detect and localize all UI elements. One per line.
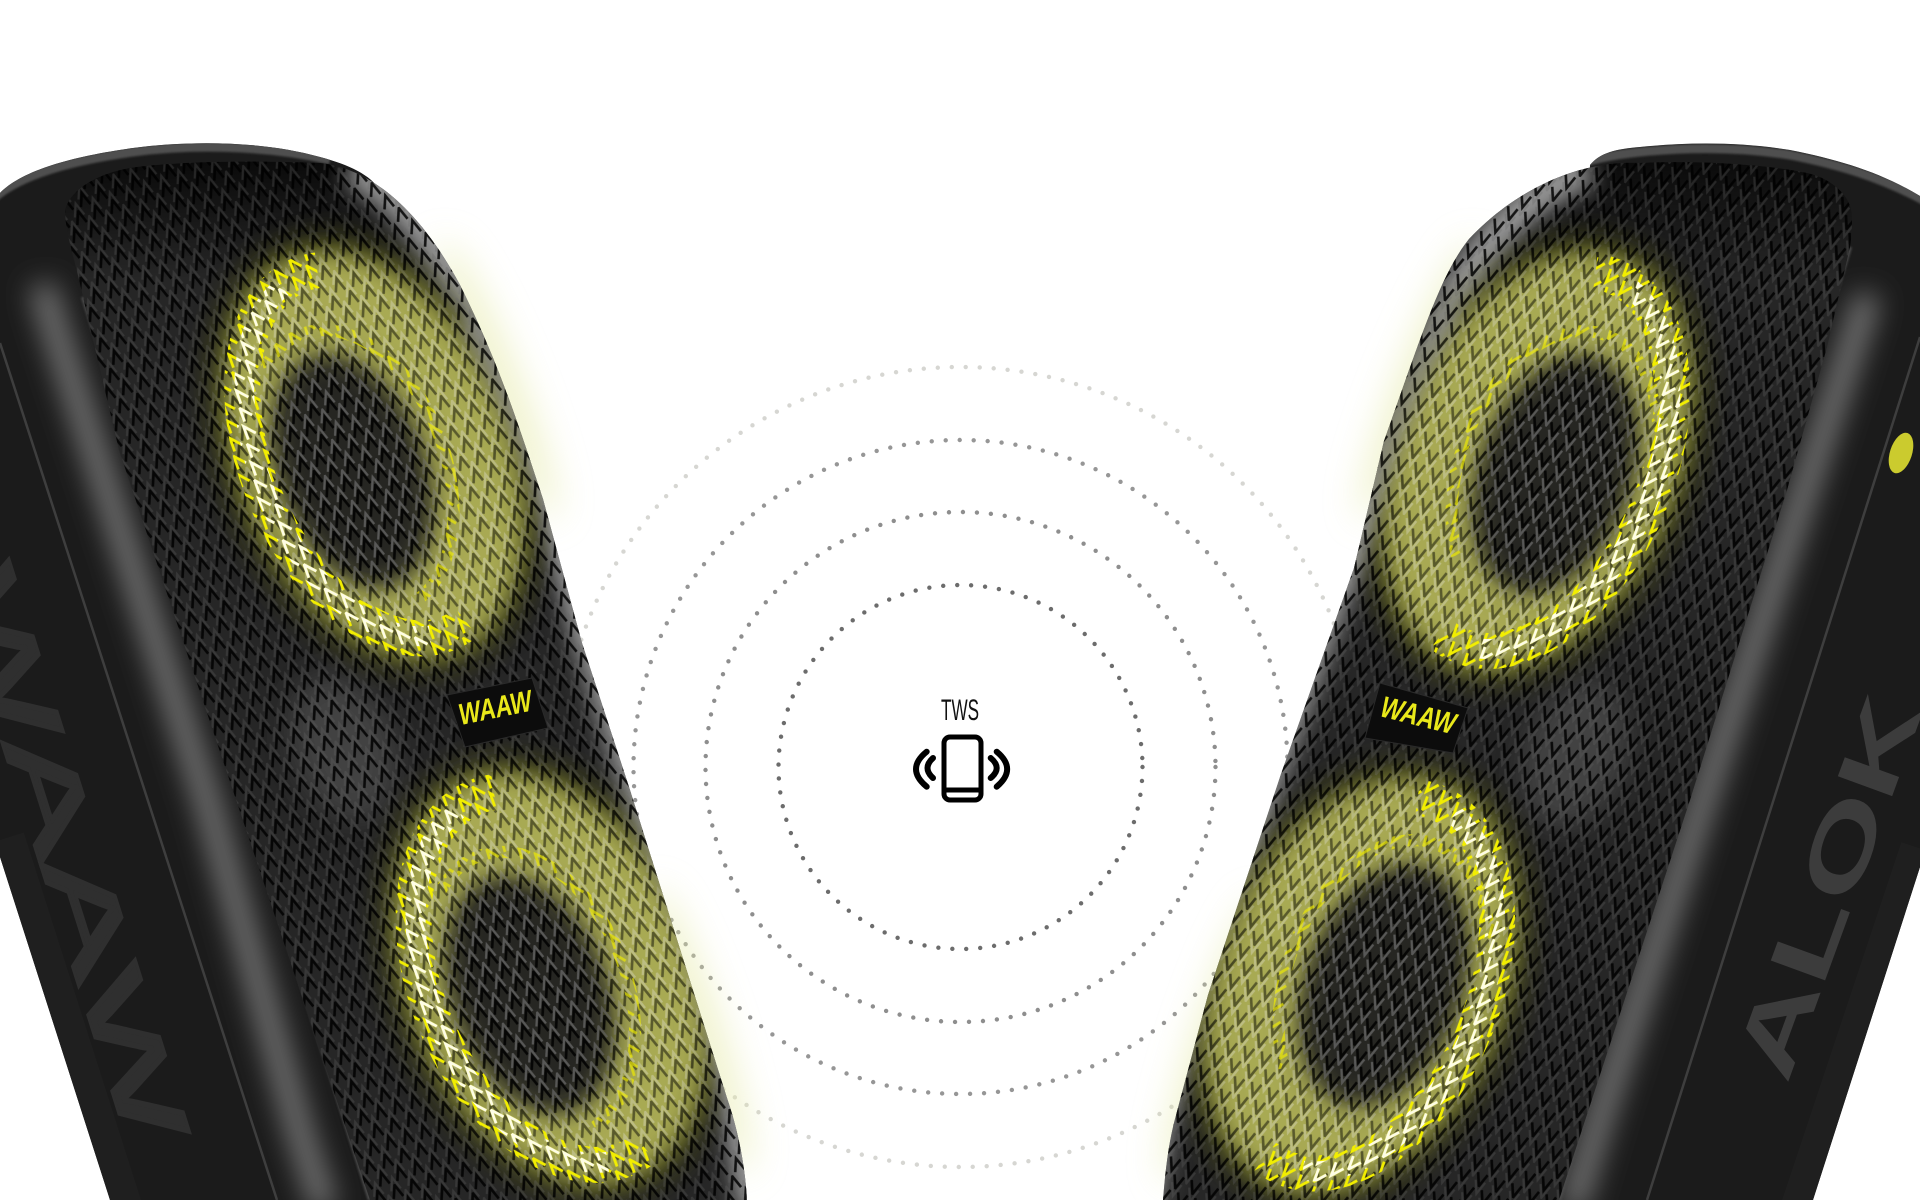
right bevel highlight (1572, 295, 1868, 1200)
yellow inner arc (1414, 302, 1696, 646)
dotted signal rings (560, 367, 1360, 1167)
left waves (916, 752, 933, 787)
white arc (193, 232, 555, 676)
right body details (1559, 149, 1920, 1200)
yellow outer arc (1348, 230, 1726, 692)
halo (1128, 713, 1592, 1200)
right top shadow (1400, 150, 1900, 280)
hole chevrons (1120, 140, 1920, 1200)
white arc (363, 752, 739, 1200)
light chevrons (0, 140, 800, 1200)
olive glow (1331, 213, 1743, 709)
left edge sheen (350, 170, 758, 1200)
light chevrons (1120, 140, 1920, 1200)
right edge sheen (1140, 170, 1590, 1200)
right panel line (1647, 337, 1920, 1200)
left bottom ring chevrons (0, 140, 800, 1200)
right grey edge over glow (1140, 310, 1450, 1200)
right grille base (1120, 140, 1920, 1200)
dark hole (412, 849, 648, 1141)
ring 4 outer (560, 367, 1360, 1167)
halo (1307, 188, 1767, 734)
left top halo (420, 233, 574, 527)
left top ring glow (202, 227, 550, 680)
right centre blob (1502, 667, 1648, 843)
right speaker (1120, 140, 1920, 1200)
olive glow (173, 213, 575, 695)
left outer band (0, 857, 110, 1200)
left bottom ring glow (319, 708, 783, 1200)
left grey chevrons (0, 140, 800, 1200)
left grille edge line (83, 297, 370, 1200)
right bottom ring chevrons (1120, 140, 1920, 1200)
right side logo text: ALOK (1716, 683, 1920, 1091)
olive veil (0, 140, 800, 1200)
white arc (1351, 233, 1723, 689)
left grille base (70, 183, 747, 1200)
badge logo text: WAAW (456, 684, 537, 732)
right waves (991, 752, 1007, 787)
right grille edge line (1559, 247, 1850, 1200)
phone body (944, 737, 981, 800)
left top shadow (65, 162, 430, 244)
left speaker (0, 140, 800, 1200)
halo (202, 227, 550, 680)
dark hole (238, 328, 466, 614)
left grille (65, 162, 747, 1200)
ring 1 inner (778, 585, 1142, 949)
olive glow (343, 732, 759, 1200)
right top halo (1343, 233, 1497, 527)
olive veil (1120, 140, 1920, 1200)
power indicator (1884, 430, 1918, 476)
hole chevrons (0, 140, 800, 1200)
right body (1559, 144, 1920, 1200)
light chevrons (1120, 140, 1920, 1200)
icon: vibrating phone (916, 737, 1007, 800)
left centre blob (284, 670, 402, 824)
left bottom halo (633, 881, 767, 1179)
badge plate (1365, 683, 1468, 753)
yellow inner arc (1241, 811, 1527, 1159)
left bevel highlight (42, 285, 325, 1200)
left badge (447, 678, 548, 747)
left mesh (0, 140, 800, 1200)
white arc (1172, 757, 1548, 1200)
yellow outer arc (1169, 755, 1551, 1200)
yellow inner arc (387, 822, 673, 1168)
olive veil (0, 140, 800, 1200)
olive veil (1120, 140, 1920, 1200)
ring 3 (634, 440, 1288, 1094)
yellow outer arc (360, 749, 742, 1200)
olive glow (1152, 738, 1568, 1200)
ring 2 (706, 512, 1216, 1022)
left top ring chevrons (0, 140, 800, 1200)
left body details (0, 147, 370, 1200)
dark hole (1439, 329, 1671, 619)
right grille (1120, 140, 1920, 1200)
badge plate (447, 678, 548, 747)
left grey edge over glow (470, 320, 758, 1200)
yellow inner arc (214, 302, 490, 640)
right bottom ring glow (1128, 713, 1592, 1200)
halo (319, 708, 783, 1200)
right mesh (1120, 140, 1920, 1200)
TWS label: TWS (941, 694, 979, 727)
right top rim (1570, 149, 1920, 201)
left body (0, 143, 380, 1200)
phone divider (944, 788, 981, 792)
left panel line (0, 343, 277, 1200)
right top ring glow (1307, 188, 1767, 734)
right outer band (1805, 850, 1920, 1200)
right badge (1365, 683, 1468, 753)
left top rim (0, 147, 330, 197)
yellow outer arc (190, 230, 558, 678)
hole chevrons (0, 140, 800, 1200)
badge logo text: WAAW (1377, 691, 1461, 742)
right bottom halo (1148, 891, 1282, 1189)
glow halos outside the speakers (420, 233, 1497, 1189)
light chevrons (0, 140, 800, 1200)
dark hole (1265, 837, 1503, 1133)
right grey chevrons (1120, 140, 1920, 1200)
right top ring chevrons (1120, 140, 1920, 1200)
hole chevrons (1120, 140, 1920, 1200)
